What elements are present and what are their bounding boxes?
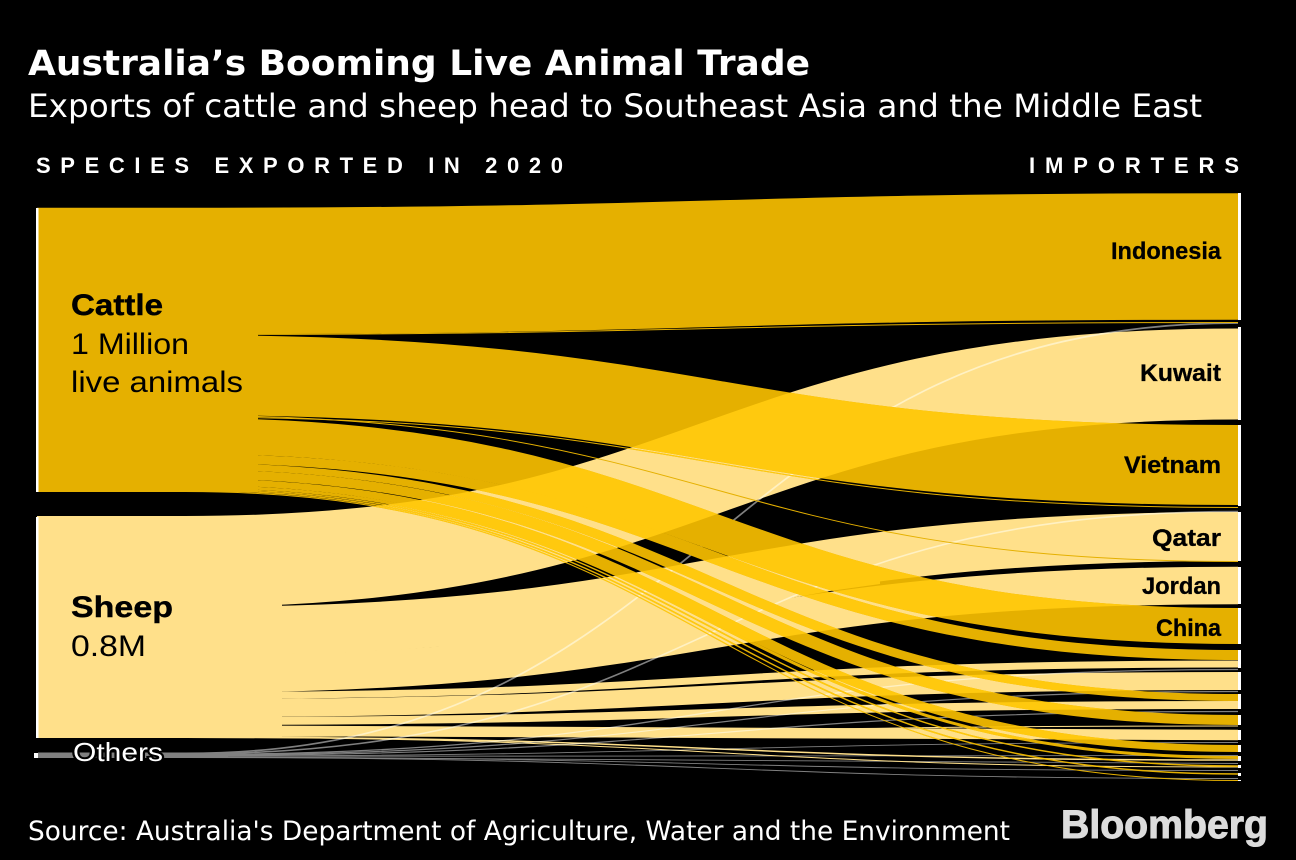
label: cattle: Cattle [71, 289, 163, 322]
right node markers [1238, 193, 1241, 781]
label: cattle [71, 289, 243, 399]
importer labels: Qatar [1152, 525, 1221, 552]
sheep flows [37, 374, 1238, 767]
cattle source block [37, 208, 258, 492]
title: Australia’s Booming Live Animal Trade [28, 44, 810, 84]
right column heading: IMPORTERS [1029, 153, 1239, 178]
label: cattle: live animals [71, 366, 243, 399]
cattle and sheep overlap [372, 392, 1238, 767]
left column heading: SPECIES EXPORTED IN 2020 [36, 153, 563, 178]
sheep source block [37, 517, 282, 738]
bloomberg logo: Bloomberg [1061, 803, 1268, 847]
importer labels: China [1156, 615, 1222, 642]
label: sheep [71, 591, 173, 663]
importer labels [1111, 238, 1222, 642]
label: cattle: 1 Million [71, 328, 189, 361]
importer labels: Vietnam [1124, 452, 1221, 479]
importer labels: Jordan [1142, 573, 1221, 600]
label: sheep: 0.8M [71, 630, 146, 663]
subtitle: Exports of cattle and sheep head to Southeast Asia and the Middle East [28, 87, 1202, 125]
importer labels: Indonesia [1111, 238, 1222, 265]
label: sheep: Sheep [71, 591, 173, 624]
others flows highlighted over sheep [336, 332, 1238, 751]
others flows [38, 323, 1238, 778]
source: Source: Australia's Department of Agriculture, Water and the Environment [28, 816, 1010, 847]
cattle flows [37, 256, 1238, 780]
label: others: Others [73, 737, 163, 767]
importer labels: Kuwait [1140, 360, 1221, 387]
others base band [38, 753, 228, 758]
left node markers [34, 208, 38, 758]
